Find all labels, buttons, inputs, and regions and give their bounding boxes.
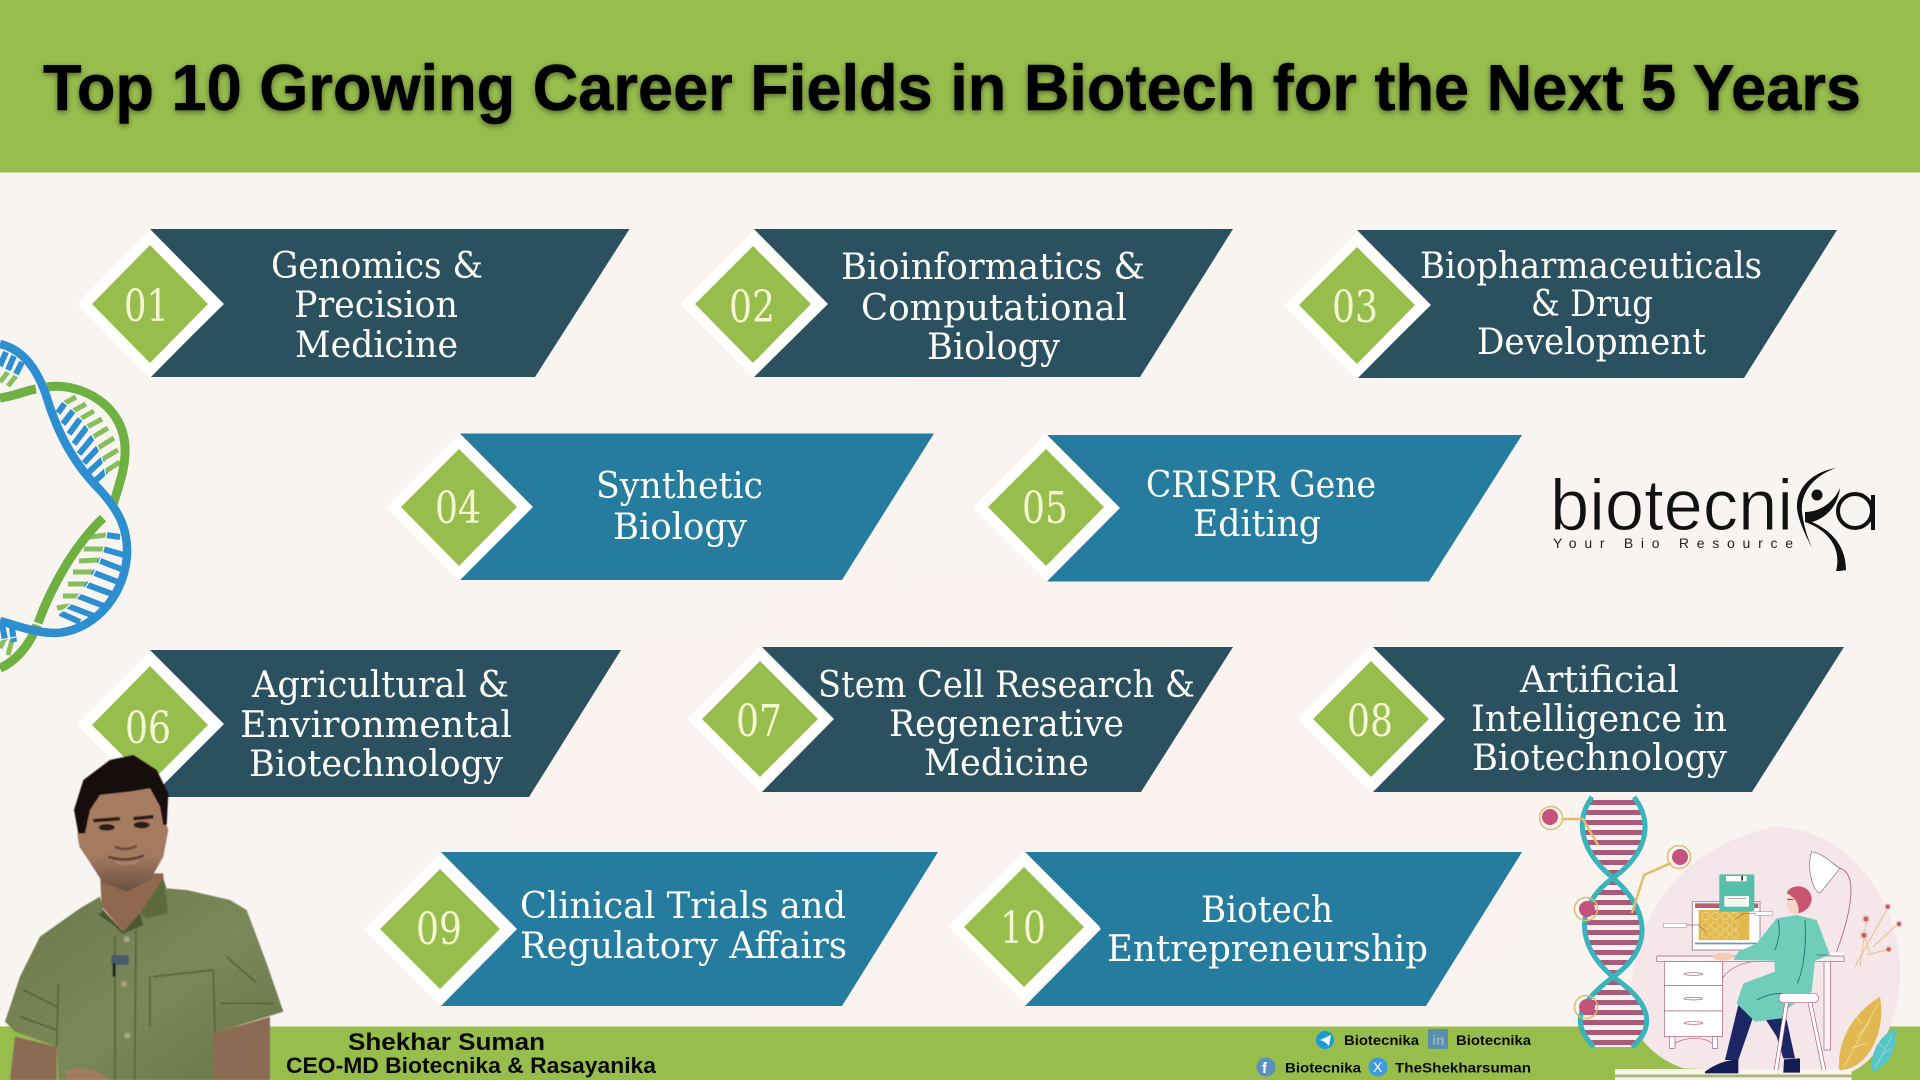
label 06 [240,665,512,785]
label 04 [596,466,763,548]
ribbon 07 [762,647,1233,792]
ribbon 03 [1357,230,1837,378]
card 07 [687,646,1233,792]
label 05: Editing [1193,504,1321,545]
photo: Shekhar Suman [5,755,283,1080]
icon: x: X [1373,1059,1383,1075]
inner collar [98,910,143,934]
ribbon 02 [754,229,1233,377]
footer: social links [1256,1029,1531,1077]
logo: biotecnika [1550,466,1873,571]
ribbon 10 [1025,852,1522,1006]
label 06: Environmental [240,705,512,746]
label 01: Precision [294,285,458,326]
diamond 09 [364,853,516,1005]
scientist shoes [1705,1058,1800,1073]
ribbon 08 [1373,647,1844,792]
lapel mic [111,955,129,977]
icon: linkedin [1428,1029,1448,1049]
diamond 10 [948,851,1100,1003]
coat lines [1757,920,1827,1000]
label 01: Genomics & [271,246,483,287]
floor [1615,1069,1852,1080]
molecule connectors [1563,819,1671,913]
number 04: 04 [435,483,481,534]
card 09 [364,852,938,1006]
logo figure [1797,468,1846,571]
center lines [0,368,107,640]
title: Top 10 Growing Career Fields in Biotech for the Next 5 Years [43,51,1861,124]
number 02: 02 [729,282,775,333]
label 07: Regenerative [889,704,1124,745]
arms [10,1017,270,1080]
monitor [1663,902,1773,950]
label 01 [271,246,483,366]
label 07: Stem Cell Research & [818,665,1195,706]
label 09: Clinical Trials and [520,886,846,927]
icon: facebook [1256,1058,1276,1077]
label 06: Agricultural & [251,665,509,706]
diamond 02 [680,231,826,378]
green strand [0,386,125,668]
label 03: Development [1477,322,1707,363]
teal leaf [1871,1028,1896,1072]
ribbon 04 [460,434,934,580]
label 04: Synthetic [596,466,763,507]
card 04 [386,434,934,581]
card 06 [77,650,621,798]
diamond 05 [973,434,1119,581]
number 06: 06 [125,703,171,754]
diamond 04 [386,434,532,581]
hand [65,1068,110,1080]
card 02 [680,229,1233,378]
label 01: Medicine [295,325,458,366]
scientist legs [1725,1005,1795,1060]
label 09 [520,886,847,967]
diamond 08 [1298,646,1444,792]
label 09: Regulatory Affairs [520,926,847,967]
plant twigs [1855,903,1902,967]
number 01: 01 [124,281,169,332]
card 01 [77,229,630,378]
icon: linkedin: in [1432,1032,1444,1048]
blue rungs [0,352,124,642]
diamond 07 [687,646,833,792]
pink blob [1630,827,1900,1073]
floppy card [1719,874,1754,912]
label 02: Computational [861,288,1127,329]
facial features [93,817,153,864]
social: facebook name: Biotecnika [1285,1060,1361,1076]
number 07: 07 [736,696,782,747]
label 10: Biotech [1201,890,1333,931]
label 10 [1107,890,1428,970]
label 08: Artificial [1519,660,1679,701]
icon: left DNA helix [0,344,127,668]
ribbon 05 [1047,435,1522,582]
label 08: Intelligence in [1471,699,1727,740]
icon: telegram [1316,1031,1334,1049]
ribbon 06 [150,650,621,797]
label 02: Bioinformatics & [841,247,1145,288]
label 07 [818,665,1195,784]
shirt details [20,930,273,1080]
DNA model [1580,797,1647,1047]
diamond 01 [77,230,223,378]
blue strand [0,344,127,633]
scene drawn in 3x coordinates [1615,827,1902,1080]
logo wordmark: biotecni [1550,466,1793,546]
label 02 [841,247,1145,368]
lamp [1810,852,1851,957]
ribbon 01 [150,229,630,377]
number 09: 09 [416,904,462,955]
label 08 [1471,660,1728,779]
footer: name [286,1029,657,1078]
molecules [1540,806,1690,1018]
buttons [121,936,130,1039]
scientist coat [1733,915,1830,1022]
icon: facebook: f [1262,1060,1268,1077]
social: telegram name: Biotecnika [1344,1032,1419,1048]
card 03 [1284,230,1837,379]
diamond 06 [77,651,223,798]
neck [100,873,163,932]
label 05: CRISPR Gene [1146,465,1376,506]
green rungs [0,372,120,655]
shirt [5,878,283,1080]
footer band [0,1026,1920,1080]
number 10: 10 [1000,903,1046,954]
face [77,788,168,892]
diamond 03 [1284,232,1430,379]
number 03: 03 [1332,282,1378,333]
social: linkedin name: Biotecnika [1456,1032,1531,1048]
label 10: Entrepreneurship [1107,929,1428,970]
label 03: & Drug [1531,284,1653,325]
desk [1657,956,1844,1050]
logo tagline: Your Bio Resource [1553,535,1793,551]
number 05: 05 [1022,483,1068,534]
logo letter a [1838,494,1873,530]
card 10 [948,851,1522,1006]
number 08: 08 [1347,696,1393,747]
label 04: Biology [613,507,748,548]
icon: x [1368,1058,1388,1076]
hair [74,755,168,833]
social: x name: TheShekharsuman [1395,1060,1531,1076]
label 05 [1146,465,1376,545]
scientist hand [1713,953,1734,961]
scientist head [1787,886,1812,915]
label 06: Biotechnology [249,744,504,785]
card 08 [1298,646,1844,792]
stool [1776,993,1824,1070]
label 08: Biotechnology [1472,738,1728,779]
label 07: Medicine [924,743,1089,784]
card 05 [973,434,1522,582]
ribbon 09 [441,852,938,1006]
label 03 [1420,246,1762,363]
illustration: scientist and DNA [1540,797,1902,1080]
role: CEO-MD Biotecnika & Rasayanika [286,1053,657,1078]
yellow leaf [1839,997,1881,1070]
label 03: Biopharmaceuticals [1420,246,1762,287]
header band [0,0,1920,172]
collar flap [140,878,168,918]
name: Shekhar Suman [348,1029,545,1056]
label 02: Biology [927,327,1061,368]
